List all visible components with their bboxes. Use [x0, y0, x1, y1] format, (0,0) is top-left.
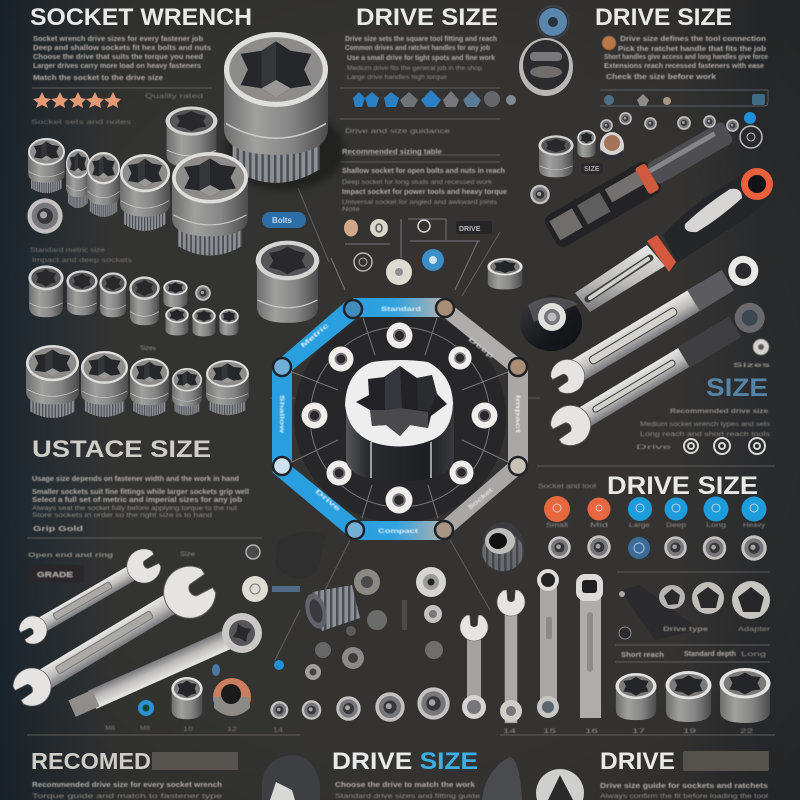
caption: faint notes under stars: Quality rated [145, 93, 204, 100]
socket row 2 [28, 265, 239, 336]
text block: drive size centre: Medium drive fits the general job in the shop [347, 65, 482, 72]
icon row: blue and grey stars [353, 90, 516, 107]
icon: right small notes: Recommended drive size [670, 408, 768, 415]
text: drive panel notes: Standard depth [684, 651, 736, 658]
captions: size row left: 14 [273, 727, 284, 734]
text block: right drive size: Drive size defines the tool connection [620, 36, 766, 43]
note row with tag: Size [180, 551, 195, 558]
band labels: Shallow [278, 395, 285, 434]
captions: size row left: M6 [105, 725, 115, 732]
icon: right small notes: Medium socket wrench types and sets [640, 421, 771, 428]
sockets: three large at bottom [615, 668, 770, 723]
icon: right small notes: Sizes [733, 362, 771, 369]
text block: drive size details: Note [342, 206, 360, 213]
text block: drive size details: Universal socket for angled and awkward joints [342, 199, 498, 206]
text block: recommended: Recommended drive size for every socket wrench [32, 782, 222, 789]
icon: blue badge top [537, 6, 569, 38]
caption: part label [581, 163, 603, 174]
captions: under coloured circles: Large [629, 522, 650, 529]
band labels: Standard [381, 306, 421, 313]
text block: drive size centre: Large drive handles high torque [347, 74, 447, 81]
text block: drive size details: Impact socket for power tools and heavy torque [342, 189, 507, 196]
captions: under coloured circles [546, 522, 766, 529]
small socket parts on diagonal [530, 112, 762, 204]
title: usage size: USTACE SIZE [32, 436, 211, 463]
captions: size row left [105, 725, 284, 734]
caption: left of drive size: Socket and tool [538, 483, 597, 490]
title bar: recommended tail [152, 752, 238, 770]
icon: right small notes [636, 339, 771, 451]
text block: drive size centre: Common drives and ratchet handles for any job [345, 45, 490, 52]
captions: under coloured circles: Deep [666, 522, 686, 529]
captions: under coloured circles: Small [546, 522, 569, 529]
icon: washer [27, 198, 63, 234]
title: recommended: RECOMED [31, 748, 151, 774]
text block: usage size: Grip Gold [33, 526, 83, 533]
band: upper left [277, 302, 359, 372]
note row with tag: Open end and ring [28, 552, 113, 559]
tool: ring wrench three [546, 293, 773, 451]
caption: faint notes under stars [30, 93, 204, 264]
sockets: bottom graded row [271, 687, 450, 722]
band: lower left [272, 460, 360, 540]
text block: socket wrench intro: Match the socket to the drive size [33, 75, 163, 82]
title: drive size centre: DRIVE SIZE [356, 4, 498, 31]
text block: drive size centre: Drive size sets the square tool fitting and reach [345, 36, 497, 43]
band labels: Drive [314, 488, 342, 513]
text block: usage size: Smaller sockets suit fine fittings while larger sockets grip well [32, 489, 249, 496]
nodes [273, 299, 527, 539]
icon: helmet right [482, 757, 522, 800]
text block: socket wrench intro: Choose the drive that suits the torque you need [33, 54, 203, 61]
captions: size row right: 19 [683, 728, 697, 735]
captions: size row right [503, 728, 754, 735]
label: blue pill [262, 212, 306, 228]
text block: socket wrench intro: Socket wrench drive sizes for every fastener job [33, 36, 203, 43]
text block: drive size centre [345, 36, 497, 81]
socket: small tyre-type near centre [487, 258, 523, 289]
title: drive size lower right: DRIVE SIZE [607, 472, 758, 500]
centre socket [345, 360, 454, 481]
icon grid: centre top [331, 219, 492, 290]
text: drive panel notes: Drive type [663, 626, 709, 633]
tool: ring wrench two [546, 248, 767, 398]
captions: under coloured circles: Long [706, 522, 727, 529]
captions: under coloured circles: Mid [590, 522, 609, 529]
tool: ring wrench [64, 607, 268, 727]
text block: usage size: Always seat the socket fully before applying torque to the nut [32, 505, 237, 512]
captions: size row right: 17 [632, 728, 646, 735]
label: blue pill: Bolts [272, 216, 293, 225]
band labels: Socket [467, 486, 495, 512]
title: socket wrench: SOCKET WRENCH [30, 4, 252, 31]
socket: ribbed nut [482, 522, 524, 572]
parts cluster: bolts and bits [302, 567, 446, 680]
text block: right drive size: Pick the ratchet handle that fits the job [618, 46, 766, 53]
text block: drive size details: Recommended sizing table [342, 149, 442, 156]
caption: part label: SIZE [584, 166, 600, 173]
caption: faint notes under stars: Standard metric size [30, 247, 105, 254]
divider rules [27, 88, 775, 735]
band: bottom [355, 521, 445, 540]
caption: faint notes under stars: Socket sets and notes [31, 119, 132, 126]
captions: size row left: 10 [183, 726, 194, 733]
icon: right small notes: Drive [636, 444, 672, 451]
title: drive lower right: DRIVE [600, 748, 675, 775]
spokes and arcs [292, 318, 508, 518]
band labels [278, 306, 521, 535]
big socket shadow [225, 110, 345, 190]
captions: size row left: M8 [140, 725, 150, 732]
captions: under coloured circles: Heavy [743, 522, 766, 529]
text block: socket wrench intro: Deep and shallow sockets fit hex bolts and nuts [33, 45, 211, 52]
text block: recommended: Torque guide and match to fastener type [32, 793, 223, 800]
icons: right of usage block [242, 531, 326, 602]
sockets: grey and orange [171, 677, 251, 719]
text block: usage size: Usage size depends on fastener width and the work in hand [32, 476, 239, 483]
captions: size row right: 14 [503, 728, 517, 735]
band: right [508, 367, 528, 466]
text block: bottom right: Drive size guide for sockets and ratchets [600, 783, 768, 790]
text block: socket wrench intro: Larger drives carry more load on heavy fasteners [33, 63, 201, 70]
text block: right drive size: Check the size before work [606, 74, 716, 81]
captions: size row left: 12 [227, 726, 238, 733]
icon grid: centre top: DRIVE [459, 226, 481, 233]
text block: drive size details: Deep socket for long studs and recessed work [342, 179, 493, 186]
icon: orange stars rating [33, 92, 121, 108]
band labels: Impact [514, 395, 521, 435]
captions: size row right: 22 [740, 728, 754, 735]
socket panel: drive types [619, 581, 770, 640]
band: top [353, 298, 445, 317]
text block: drive size centre: Use a small drive for tight spots and fine work [347, 55, 495, 62]
band labels: Metric [300, 322, 331, 350]
tool: long open wrench [5, 559, 222, 718]
band: upper right [441, 301, 523, 373]
band labels: Compact [378, 528, 419, 535]
text block: recommended [32, 782, 223, 800]
text block: bottom right: Always confirm the fit before loading the tool [600, 793, 769, 800]
text block: usage size [32, 476, 249, 533]
icons: coloured drive circles [544, 496, 766, 522]
icon: helmet left [262, 755, 320, 800]
text block: usage size: Store sockets in order so the right size is to hand [32, 512, 212, 519]
text: drive panel notes: Long [741, 651, 767, 658]
small caption: Sizes [140, 345, 157, 352]
title: drive size right: DRIVE SIZE [595, 4, 732, 31]
tool: short open wrench [14, 544, 165, 651]
icons: ring badges [684, 438, 765, 454]
band: lower right [441, 460, 523, 537]
band labels: Deep [467, 336, 495, 360]
text block: socket wrench intro [33, 36, 211, 82]
icons: grey ring row [548, 535, 767, 561]
socket cluster top left [28, 106, 319, 323]
text block: usage size: Select a full set of metric and imperial sizes for any job [32, 497, 242, 504]
text: drive panel notes: Adapter [738, 626, 771, 633]
note row with tag: GRADE [37, 572, 73, 579]
tool: ratchet body dark diagonal [542, 116, 738, 250]
text block: bottom right [600, 783, 769, 800]
socket row 3 [26, 345, 249, 418]
note row with tag [28, 551, 195, 582]
icon bar: right info strip [600, 90, 768, 106]
icon: socket bottom right [536, 769, 584, 800]
tool: ratchet with orange handle [520, 168, 773, 351]
socket: large hero [224, 32, 328, 183]
centre diagram: socket octagon [272, 298, 528, 540]
wrenches: vertical group [460, 569, 603, 723]
text block: right drive size: Extensions reach recessed fasteners with ease [604, 63, 764, 70]
text block: bottom centre [335, 782, 481, 800]
text: drive panel notes [621, 626, 771, 659]
text: drive panel notes: Short reach [621, 652, 664, 659]
text block: bottom centre: Choose the drive to match the work [335, 782, 475, 789]
text block: right drive size: Short handles give access and long handles give force [604, 54, 768, 61]
title bar: drive tail [683, 751, 769, 771]
icons: small badges lower left [138, 660, 287, 718]
captions: size row right: 16 [585, 728, 599, 735]
icon: right small notes: Long reach and short reach tools [640, 431, 771, 438]
band: left [272, 367, 292, 466]
text block: right drive size [602, 36, 768, 81]
ring: dark inner disc [294, 311, 506, 523]
text block: drive size details: Drive and size guidance [345, 128, 451, 135]
text block: drive size details [342, 128, 507, 213]
text block: bottom centre: Standard drive sizes and fitting guide [335, 793, 481, 800]
size label: SIZE [706, 374, 768, 402]
caption: faint notes under stars: Impact and deep sockets [32, 257, 133, 264]
title: drive size bottom centre: DRIVE SIZE [332, 748, 478, 775]
icon: dark capsule socket [519, 38, 573, 96]
captions: size row right: 15 [543, 728, 557, 735]
text block: drive size details: Shallow socket for open bolts and nuts in reach [342, 168, 505, 175]
washers around centre [301, 322, 498, 514]
